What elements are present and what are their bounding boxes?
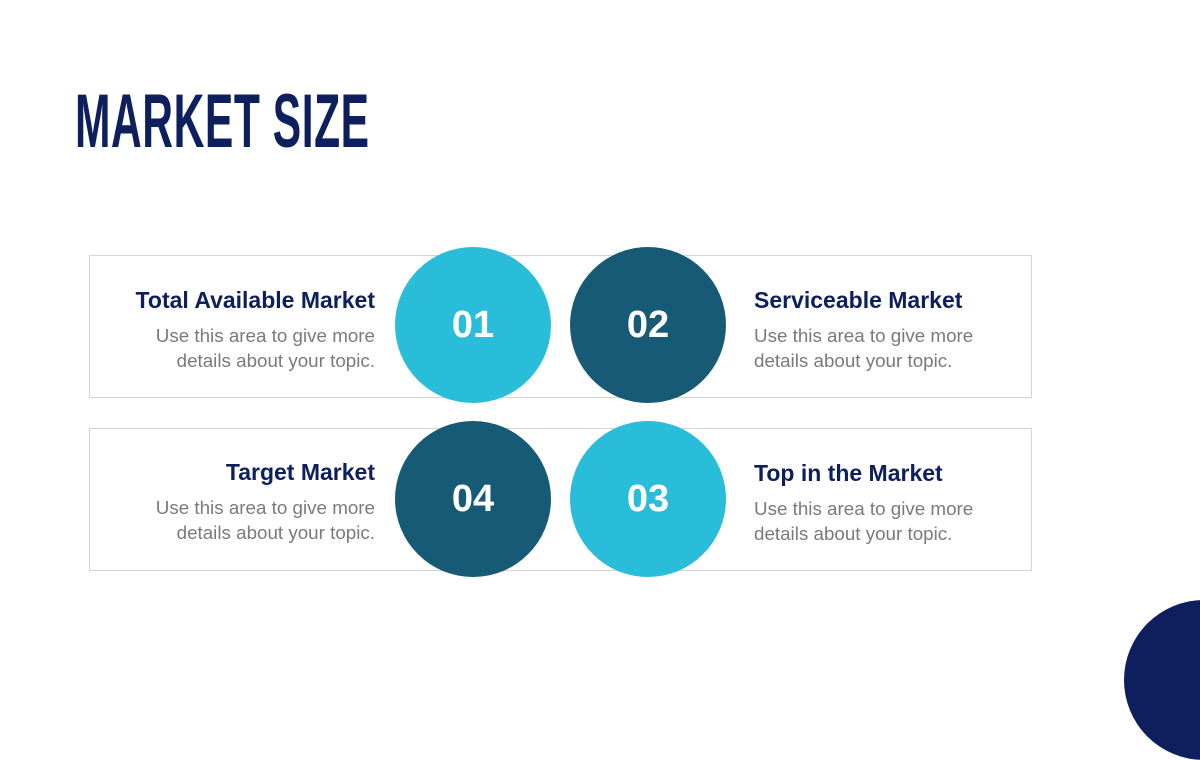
text: target market: Use this area to give more	[156, 497, 375, 518]
circle 03	[570, 421, 726, 577]
circle 04: 04	[452, 478, 494, 520]
text: top in the market: Top in the Market	[754, 460, 943, 486]
text: target market: Target Market	[226, 459, 375, 485]
circle 04	[395, 421, 551, 577]
text: top in the market	[754, 460, 973, 544]
text: target market: details about your topic.	[177, 522, 375, 543]
panel: bottom row box	[89, 428, 1032, 571]
panel: top row box	[89, 255, 1032, 398]
text: target market	[156, 459, 375, 543]
title: MARKET SIZE	[75, 79, 370, 164]
circle 01	[395, 247, 551, 403]
text: total available market: Use this area to give more	[156, 325, 375, 346]
text: total available market	[136, 287, 375, 371]
text: total available market: details about your topic.	[177, 350, 375, 371]
circle 02: 02	[627, 304, 669, 346]
text: serviceable market: details about your topic.	[754, 350, 952, 371]
text: serviceable market: Use this area to give more	[754, 325, 973, 346]
circle 03: 03	[627, 478, 669, 520]
text: total available market: Total Available Market	[136, 287, 375, 313]
text: serviceable market: Serviceable Market	[754, 287, 962, 313]
circle 02	[570, 247, 726, 403]
circle 01: 01	[452, 304, 494, 346]
text: top in the market: Use this area to give more	[754, 498, 973, 519]
text: serviceable market	[754, 287, 973, 371]
text: top in the market: details about your topic.	[754, 523, 952, 544]
decorative corner circle	[1124, 600, 1200, 760]
